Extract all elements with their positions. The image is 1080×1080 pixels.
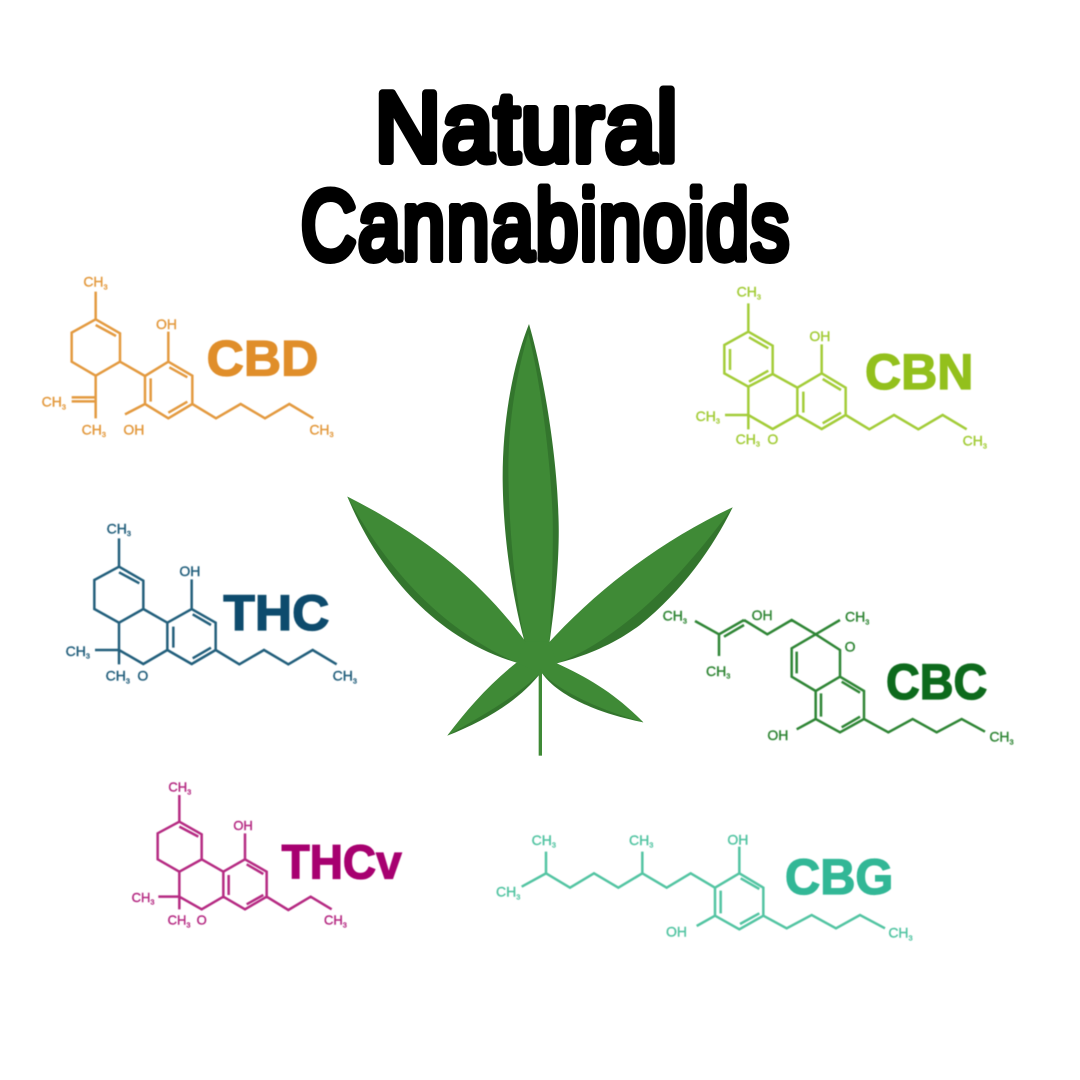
molecule: THC: CH — [66, 643, 86, 659]
molecule: THCv: CH — [132, 890, 150, 905]
molecule: THC: OH — [179, 563, 200, 579]
molecule: CBN: CH — [737, 284, 757, 300]
molecule: THCv — [132, 780, 402, 929]
molecule: CBD: 3 — [330, 430, 334, 439]
title: Cannabinoids — [301, 170, 791, 280]
molecule: CBN: CH — [963, 433, 983, 449]
molecule: CBD: CH — [42, 394, 62, 410]
molecule: CBD: CBD — [207, 331, 318, 387]
molecule: CBG: 3 — [552, 841, 556, 850]
molecule: CBD: 3 — [62, 402, 66, 411]
molecule: THCv: CH — [168, 780, 187, 795]
molecule: CBD: CH — [82, 421, 102, 437]
molecule: THCv: 3 — [343, 920, 347, 929]
molecule: THC — [66, 520, 357, 685]
icon: cannabis leaf — [347, 324, 733, 756]
molecule: CBN — [696, 284, 987, 450]
molecule: CBD: 3 — [102, 430, 106, 439]
molecule: CBG: CH — [629, 832, 649, 848]
molecule: THCv: 3 — [150, 898, 155, 907]
molecule: CBN: O — [767, 431, 778, 447]
molecule: CBC: 3 — [1010, 737, 1014, 746]
title — [301, 73, 791, 280]
molecule: CBN: CBN — [865, 344, 973, 400]
molecule: THC: THC — [223, 585, 329, 641]
molecule: CBC: CH — [845, 609, 865, 625]
molecule: THC: 3 — [86, 652, 90, 661]
molecule: CBG: CH — [532, 832, 552, 848]
molecule: CBG: 3 — [516, 892, 520, 901]
molecule: CBD — [42, 274, 334, 439]
molecule: THCv: CH — [168, 913, 186, 928]
molecule: CBD: OH — [156, 316, 177, 332]
molecule: CBC: 3 — [683, 616, 687, 625]
molecule: CBC: CH — [663, 608, 683, 624]
molecule: CBN: CH — [696, 408, 716, 424]
molecule: THC: CH — [106, 668, 126, 684]
molecule: CBC: O — [845, 639, 856, 655]
molecule: THC: CH — [107, 520, 127, 536]
molecule: CBC: OH — [767, 727, 788, 743]
molecule: CBC: 3 — [726, 672, 730, 681]
molecule: CBG: 3 — [909, 933, 913, 942]
molecule: THCv: O — [197, 913, 207, 928]
molecule: THCv: OH — [233, 818, 253, 833]
molecule: THC: 3 — [127, 529, 131, 538]
molecule: CBG: CH — [496, 884, 516, 900]
molecule: CBG: CH — [888, 925, 909, 941]
molecule: CBN: OH — [809, 328, 830, 344]
molecule: CBC: CH — [989, 729, 1010, 745]
molecule: CBC: 3 — [865, 617, 869, 626]
molecule: CBD: CH — [309, 421, 330, 437]
molecule: THC: 3 — [353, 676, 357, 685]
molecule: CBC: CH — [706, 663, 726, 679]
molecule: CBN: 3 — [983, 441, 987, 450]
molecule: CBG: OH — [666, 924, 687, 940]
molecule: CBD: 3 — [104, 282, 108, 291]
molecule: CBN: CH — [736, 431, 756, 447]
molecule: CBC: OH — [752, 607, 773, 623]
molecule: CBG: CBG — [785, 849, 893, 905]
molecule: THCv: 3 — [186, 920, 191, 929]
molecule: THC: O — [137, 668, 148, 684]
molecule: CBD: CH — [83, 274, 104, 290]
molecule: THCv: 3 — [187, 787, 191, 796]
molecule: THCv: THCv — [282, 836, 402, 889]
molecule: CBD: OH — [123, 421, 144, 437]
molecule: CBN: 3 — [756, 440, 760, 449]
title: Natural — [375, 73, 679, 183]
molecule: CBN: 3 — [757, 292, 761, 301]
molecule: THC: CH — [333, 668, 353, 684]
molecule: CBG: 3 — [649, 841, 653, 850]
molecule: THCv: CH — [324, 913, 343, 928]
molecule: CBC: CBC — [886, 654, 987, 710]
molecule: CBN: 3 — [716, 417, 720, 426]
molecule: CBG — [496, 831, 913, 942]
molecule: CBC — [663, 607, 1014, 746]
molecule: THC: 3 — [126, 676, 130, 685]
molecule: CBG: OH — [727, 831, 748, 847]
